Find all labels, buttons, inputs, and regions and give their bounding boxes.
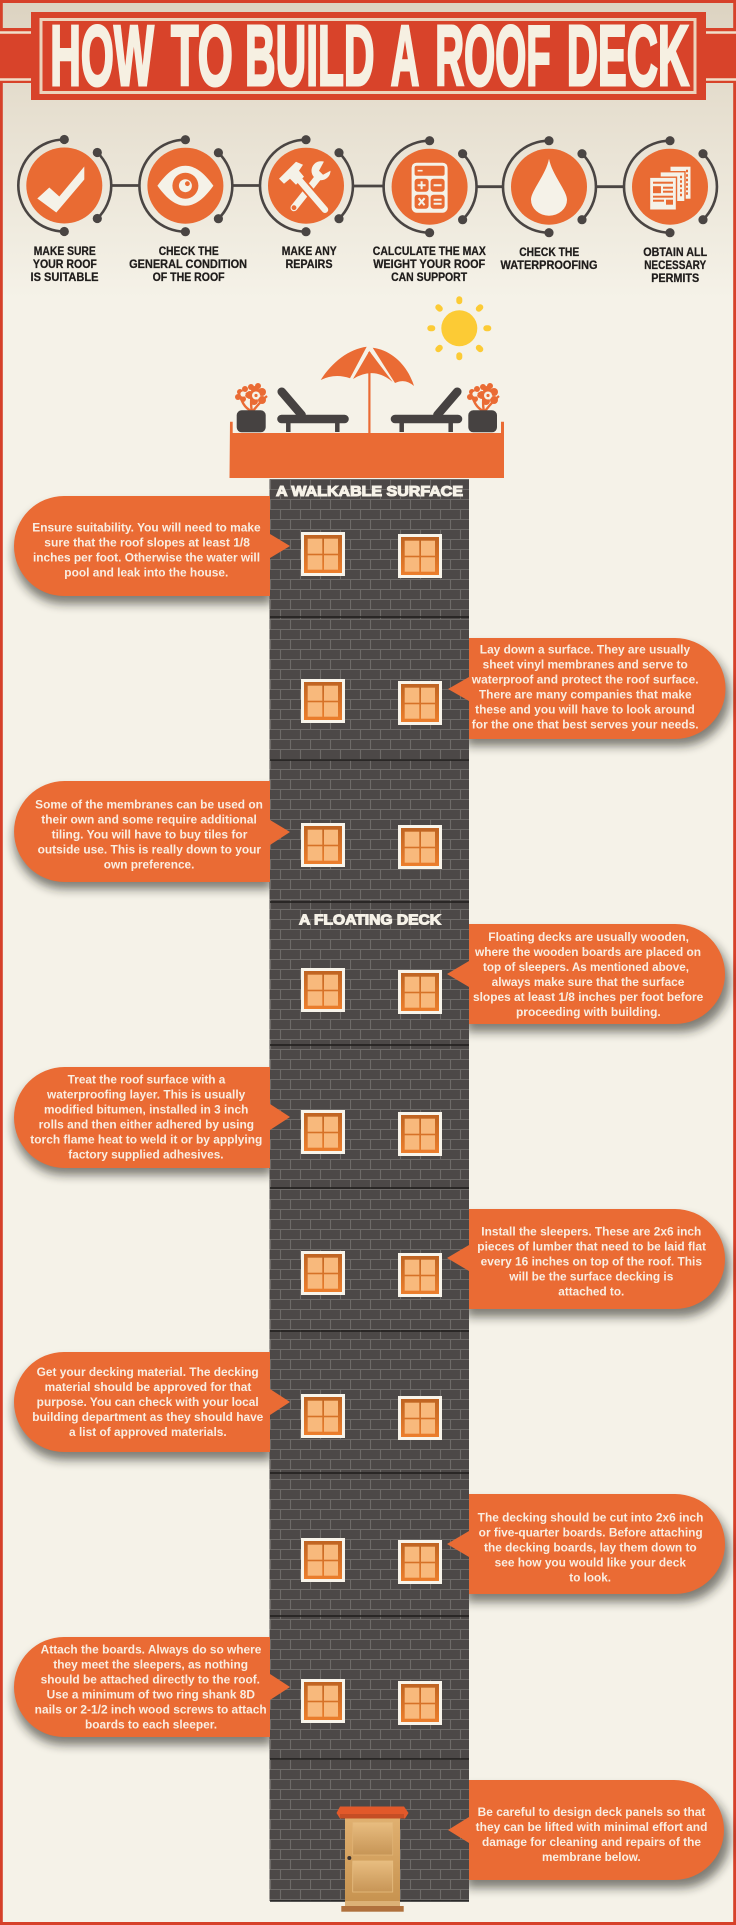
callout: floating decks: top of sleepers. As mentioned above, [483,962,689,974]
icon: left flower pot [235,383,267,432]
callout: lay down a surface: There are many companies that make [479,689,692,701]
callout: install the sleepers: attached to. [558,1286,624,1298]
title: TO [171,9,233,104]
callout: decking cut: see how you would like your deck [495,1557,687,1569]
roof slab [230,422,504,478]
icon: right flower pot [467,383,499,432]
heading: a walkable surface: A WALKABLE SURFACE [276,484,463,500]
icon: sun [430,299,488,357]
callout: waterproofing layer: rolls and then either adhered by using [39,1119,254,1131]
icon: documents [624,136,717,237]
callout: attach the boards [14,1637,290,1737]
callout: floating decks: slopes at least 1/8 inches per foot before [473,992,703,1004]
callout: decking material: material should be approved for that [45,1382,252,1394]
callout: floating decks: proceeding with building. [516,1007,661,1019]
callout: decking material: building department as they should have [32,1412,263,1424]
heading: a floating deck: A FLOATING DECK [299,912,442,928]
callout: decking cut: to look. [569,1572,611,1584]
callout: install the sleepers: pieces of lumber that need to be laid flat [477,1241,706,1253]
step labels: NECESSARY [644,260,706,272]
title: A [391,9,419,104]
step labels: WEIGHT YOUR ROOF [373,259,485,271]
callout: decking cut: the decking boards, lay them down to [484,1542,697,1554]
callout: decking cut: The decking should be cut into 2x6 inch [478,1512,703,1524]
icon: hammer and wrench [260,135,353,236]
step labels: YOUR ROOF [33,259,97,271]
callout: decking material: Get your decking material. The decking [37,1367,259,1379]
callout: membranes: own preference. [104,859,194,871]
callout: lay down a surface: for the one that best serves your needs. [472,719,699,731]
callout: ensure suitability: inches per foot. Otherwise the water will [33,552,260,564]
icon: check mark [18,135,111,236]
callout: floating decks: always make sure that the surface [492,977,684,989]
step labels: MAKE SURE [34,246,96,258]
callout: deck panels [448,1780,724,1880]
callout: ensure suitability: pool and leak into the house. [64,567,228,579]
callout: decking cut [447,1494,725,1594]
callout: deck panels: Be careful to design deck panels so that [478,1807,706,1819]
step labels: IS SUITABLE [30,272,99,284]
callout: membranes: their own and some require additional [41,814,257,826]
title: HOW [50,9,154,104]
step labels: OBTAIN ALL [643,247,707,259]
callout: waterproofing layer: factory supplied adhesives. [68,1149,224,1161]
step labels [30,246,707,285]
step labels: CALCULATE THE MAX [373,246,486,258]
callout: decking material [14,1352,290,1452]
windows [301,532,442,1725]
icon: eye [139,135,232,236]
callout: attach the boards: Use a minimum of two ring shank 8D [47,1690,255,1702]
callout: lay down a surface [448,638,726,739]
callout: lay down a surface: waterproof and protect the roof surface. [471,674,699,686]
callout: attach the boards: should be attached directly to the roof. [41,1675,260,1687]
callout: attach the boards: Attach the boards. Always do so where [41,1645,261,1657]
callout: deck panels: membrane below. [542,1852,641,1864]
callout: ensure suitability: sure that the roof slopes at least 1/8 [44,537,251,549]
icon: umbrella [321,347,414,433]
title: ROOF [435,9,551,104]
callout: install the sleepers: will be the surface decking is [508,1271,673,1283]
title banner [0,9,736,104]
callout: attach the boards: boards to each sleeper. [85,1720,217,1732]
callout: waterproofing layer: Treat the roof surface with a [68,1074,226,1086]
bubble shadows [14,504,730,1888]
icon: door [336,1806,408,1912]
callout: install the sleepers: every 16 inches on top of the roof. This [481,1256,702,1268]
callout: attach the boards: they meet the sleepers, as nothing [53,1660,248,1672]
step labels: PERMITS [651,273,700,285]
icon: calculator [384,136,477,237]
step labels: CHECK THE [519,247,579,259]
title [50,9,689,104]
callout: ensure suitability: Ensure suitability. You will need to make [32,522,261,534]
callout: waterproofing layer: waterproofing layer. This is usually [46,1089,246,1101]
callout: decking material: purpose. You can check with your local [37,1397,259,1409]
step labels: CAN SUPPORT [391,272,467,284]
step labels: WATERPROOFING [500,260,598,272]
icon: right lounger [395,392,458,432]
callout: waterproofing layer [14,1067,290,1168]
connectors between step icons [111,186,624,187]
callout: waterproofing layer: torch flame heat to weld it or by applying [30,1134,262,1146]
icon: water drop [503,136,596,237]
icon: left lounger [282,392,344,432]
step labels: OF THE ROOF [153,272,225,284]
title: BUILD [245,9,374,104]
callout: membranes: outside use. This is really down to your [38,844,262,856]
callout: lay down a surface: Lay down a surface. They are usually [480,644,691,656]
callout: waterproofing layer: modified bitumen, installed in 3 inch [44,1104,248,1116]
step labels: GENERAL CONDITION [129,259,247,271]
callout: membranes [14,781,290,882]
callout: install the sleepers [447,1209,725,1309]
callout: attach the boards: nails or 2-1/2 inch wood screws to attach [35,1705,267,1717]
callout: decking cut: or five-quarter boards. Before attaching [479,1527,703,1539]
callout: lay down a surface: sheet vinyl membranes and serve to [483,659,688,671]
callout: deck panels: they can be lifted with minimal effort and [476,1822,707,1834]
step labels: REPAIRS [286,259,333,271]
callout: decking material: a list of approved materials. [69,1427,227,1439]
step labels: CHECK THE [159,246,219,258]
callout: floating decks [447,924,725,1024]
callout: floating decks: Floating decks are usually wooden, [488,932,689,944]
callout: install the sleepers: Install the sleepers. These are 2x6 inch [481,1226,701,1238]
callout: ensure suitability [14,496,290,596]
callout: membranes: tiling. You will have to buy tiles for [52,829,248,841]
callout: lay down a surface: these and you will have to look around [475,704,695,716]
callout: floating decks: where the wooden boards are placed on [474,947,701,959]
callout: membranes: Some of the membranes can be used on [35,799,263,811]
callout: deck panels: damage for cleaning and repairs of the [482,1837,701,1849]
brick tower [270,479,469,1901]
step labels: MAKE ANY [282,246,337,258]
